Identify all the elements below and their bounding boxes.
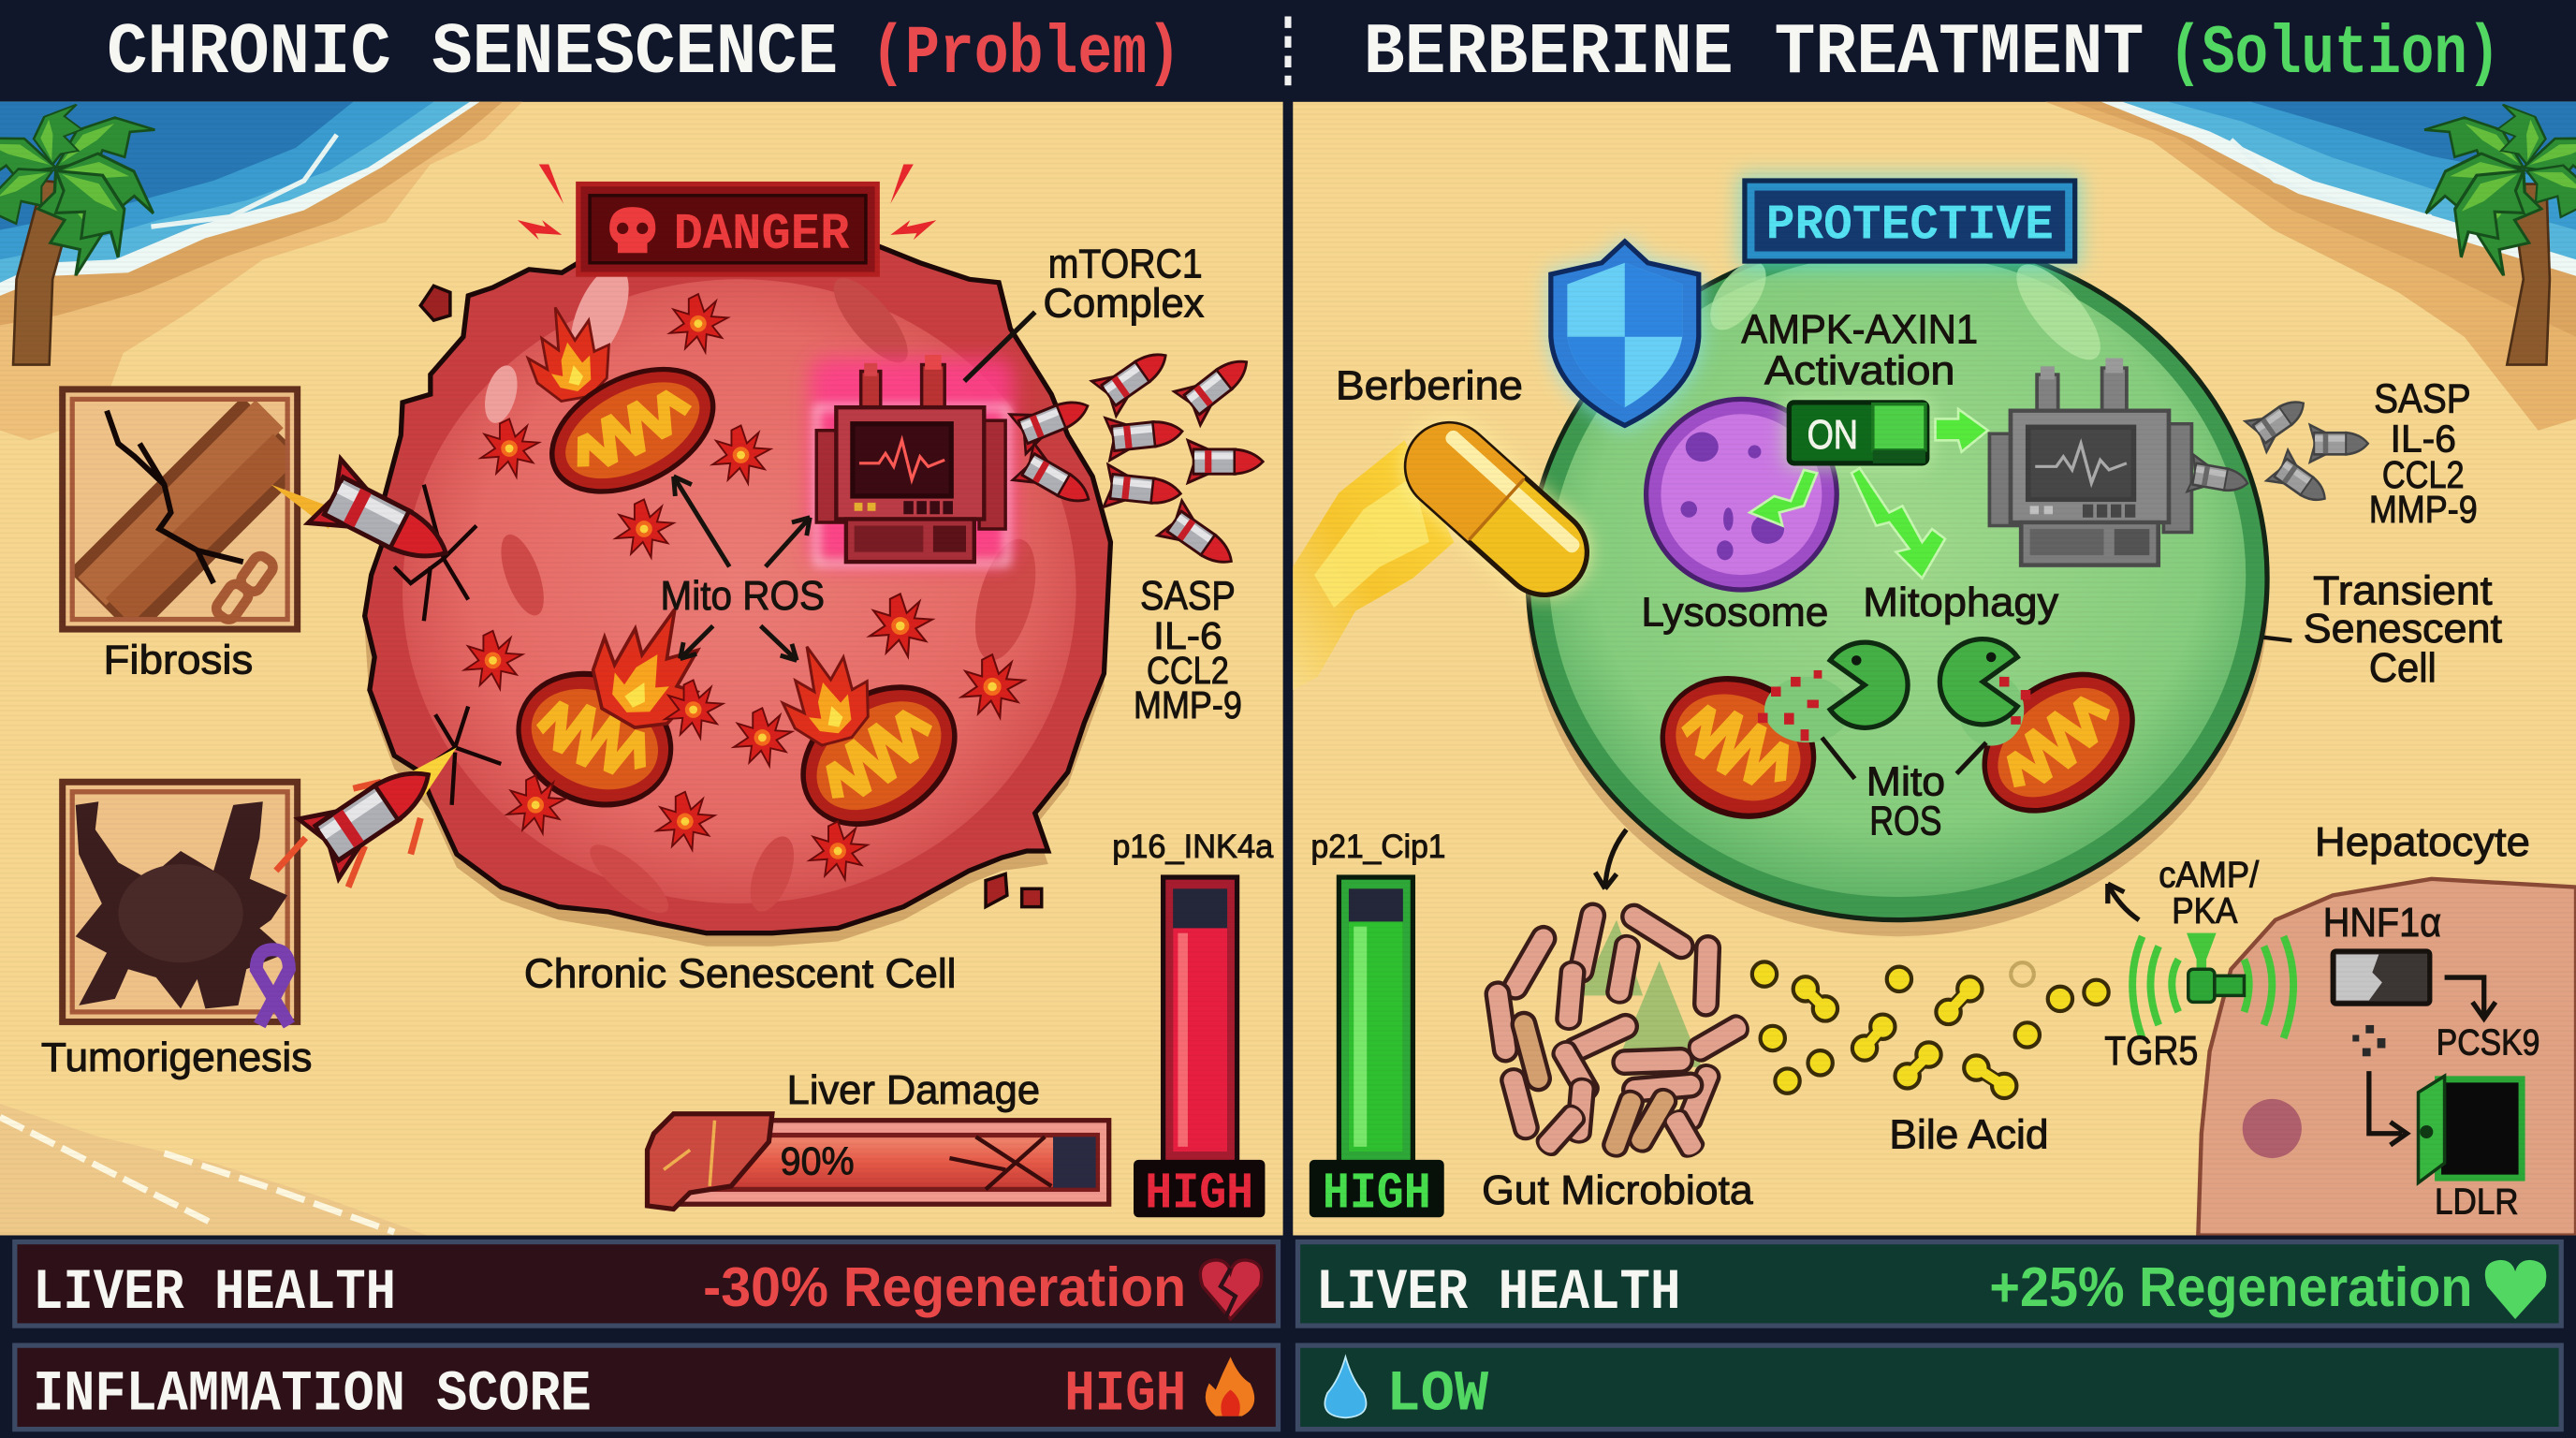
- ROS bursts: [464, 294, 1024, 879]
- lysosome: [1647, 399, 1837, 590]
- icon: flame: [1206, 1357, 1254, 1416]
- label: SASP list: SASP: [2374, 375, 2471, 421]
- icon: broken heart: [1200, 1260, 1262, 1319]
- panel: fibrosis: [63, 389, 298, 629]
- arrow: to PCSK9: [2445, 977, 2496, 1019]
- transient senescent cell: [1526, 237, 2291, 936]
- panel: liver health problem: [15, 1242, 1278, 1326]
- header bar: [0, 0, 2576, 102]
- label: Mito ROS with arrows: Mito ROS: [661, 573, 825, 619]
- label: chronic senescent cell: Chronic Senescent Cell: [524, 951, 956, 997]
- label: mTORC1 complex: mTORC1: [1048, 242, 1203, 287]
- panel: inflammation score problem: INFLAMMATION SCORE: [33, 1363, 592, 1428]
- panel: liver health problem: -30% Regeneration: [703, 1255, 1186, 1318]
- chronic senescent cell: [365, 246, 1110, 946]
- label: berberine: Berberine: [1336, 362, 1523, 408]
- label: hepatocyte: Hepatocyte: [2315, 819, 2530, 865]
- device: mTORC1 complex: [810, 355, 1014, 565]
- arrows: green activation: [1749, 409, 1988, 579]
- switch: ON: [1786, 399, 1930, 466]
- beach scene top left: [0, 102, 522, 440]
- label: cAMP PKA: [2159, 856, 2260, 932]
- panel: liver health solution: +25% Regeneration: [1989, 1255, 2472, 1318]
- pill: berberine capsule: [1386, 404, 1607, 615]
- hepatocyte cell: [2198, 879, 2576, 1236]
- arrow: cAMP to cell: [2108, 884, 2139, 920]
- HNF1α gene block: [2333, 951, 2430, 1056]
- protective badge: PROTECTIVE: [1766, 197, 2054, 253]
- label: SASP list: [1134, 573, 1242, 726]
- label: transient senescent cell: Senescent: [2304, 606, 2502, 652]
- missile to fibrosis: [271, 459, 462, 585]
- gut microbiota cluster: [1485, 901, 1751, 1160]
- label: transient senescent cell: Cell: [2369, 645, 2437, 691]
- danger badge: DANGER: [674, 207, 850, 264]
- palm tree left: [0, 98, 165, 365]
- label: Mito ROS: ROS: [1869, 798, 1942, 844]
- label: SASP list: CCL2: [2382, 453, 2465, 496]
- arrow to gut microbiota: [1595, 829, 1627, 888]
- arrow: to LDLR: [2369, 1071, 2407, 1145]
- gauge: p21_Cip1: [1310, 877, 1444, 1224]
- label: SASP list: MMP-9: [2369, 488, 2478, 531]
- LDLR door: [2419, 1076, 2522, 1182]
- SASP missiles: [1010, 338, 1263, 579]
- title: berberine treatment: (Solution): [2169, 16, 2500, 94]
- mitochondria with flames: [499, 297, 981, 852]
- panel: liver health solution: [1298, 1242, 2561, 1326]
- label: SASP list: IL-6: [1153, 614, 1222, 657]
- berberine comet tail: [1293, 440, 1454, 690]
- title: chronic senescence: CHRONIC SENESCENCE: [107, 13, 838, 95]
- label: SASP list: SASP: [1140, 573, 1236, 619]
- SASP reduced missiles: [2187, 388, 2368, 514]
- label: HNF1α: HNF1α: [2323, 900, 2441, 946]
- missile to tumor: [276, 745, 457, 888]
- icon: water drop: [1325, 1357, 1366, 1417]
- label: cAMP PKA: PKA: [2172, 891, 2238, 932]
- palm tree right: [2415, 98, 2576, 365]
- panel: liver health solution: LIVER HEALTH: [1316, 1261, 1680, 1326]
- TGR5 receptor: [2132, 933, 2293, 1038]
- panel: chronic senescence problem: [0, 98, 1283, 1236]
- label: LDLR: LDLR: [2435, 1182, 2519, 1223]
- label: Mito ROS: [1822, 738, 1986, 844]
- title: chronic senescence: (Problem): [871, 16, 1181, 94]
- label: lysosome: Lysosome: [1641, 590, 1828, 636]
- gauge: p16_INK4a: [1134, 877, 1265, 1224]
- switch: ON: ON: [1808, 412, 1858, 458]
- panel: inflammation score solution: LOW: [1386, 1363, 1488, 1428]
- panel: tumorigenesis: [63, 782, 298, 1025]
- panel: inflammation score problem: HIGH: [1064, 1363, 1186, 1428]
- label: PCSK9: PCSK9: [2437, 1023, 2539, 1064]
- label: cAMP PKA: cAMP/: [2159, 856, 2260, 896]
- gauge: p16_INK4a: HIGH: [1145, 1167, 1253, 1224]
- label: tumorigenesis: Tumorigenesis: [41, 1034, 312, 1080]
- label: SASP list: [2369, 375, 2478, 531]
- panel: berberine treatment solution: [1293, 98, 2576, 1236]
- label: Mito ROS with arrows: [661, 477, 825, 660]
- bar: liver damage 90%: [648, 1114, 1109, 1209]
- label: fibrosis: Fibrosis: [104, 637, 253, 682]
- label: p21_Cip1: p21_Cip1: [1311, 829, 1445, 865]
- status area background: [0, 1236, 2576, 1438]
- panel: inflammation score solution: [1298, 1345, 2561, 1430]
- icon: green heart: [2485, 1260, 2546, 1319]
- label: Mito ROS: Mito: [1866, 758, 1945, 804]
- gauge: p21_Cip1: HIGH: [1323, 1167, 1431, 1224]
- mitophagy scene: [1638, 639, 2159, 843]
- danger badge: [518, 164, 936, 274]
- label: TGR5: TGR5: [2104, 1028, 2198, 1074]
- label: SASP list: CCL2: [1147, 649, 1229, 692]
- label: SASP list: IL-6: [2391, 418, 2456, 461]
- protective badge: [1738, 174, 2082, 268]
- label: mTORC1 complex: [964, 242, 1205, 381]
- panel: inflammation score problem: [15, 1345, 1278, 1430]
- device: inactive mTORC1: [1989, 359, 2191, 565]
- label: SASP list: MMP-9: [1134, 683, 1242, 726]
- label: liver damage: Liver Damage: [787, 1067, 1040, 1113]
- label: AMPK-AXIN1 activation: Activation: [1764, 348, 1955, 394]
- label: AMPK-AXIN1 activation: AMPK-AXIN1: [1741, 307, 1978, 353]
- icon: shield: [1547, 238, 1702, 431]
- label: transient senescent cell: Transient: [2313, 568, 2492, 614]
- label: AMPK-AXIN1 activation: [1741, 307, 1978, 394]
- label: mTORC1 complex: Complex: [1043, 281, 1205, 327]
- beach corner bottom left: [0, 1104, 427, 1236]
- bile acid particles: [1752, 961, 2109, 1098]
- label: mitophagy: Mitophagy: [1863, 580, 2058, 625]
- beach scene top right: [2045, 102, 2576, 431]
- panel: liver health problem: LIVER HEALTH: [33, 1261, 396, 1326]
- bar: liver damage 90%: 90%: [781, 1139, 855, 1183]
- title: berberine treatment: BERBERINE TREATMENT: [1364, 13, 2144, 95]
- label: bile acid: Bile Acid: [1889, 1112, 2049, 1158]
- label: gut microbiota: Gut Microbiota: [1482, 1167, 1753, 1213]
- label: p16_INK4a: p16_INK4a: [1112, 829, 1274, 865]
- label: transient senescent cell: [2304, 568, 2502, 691]
